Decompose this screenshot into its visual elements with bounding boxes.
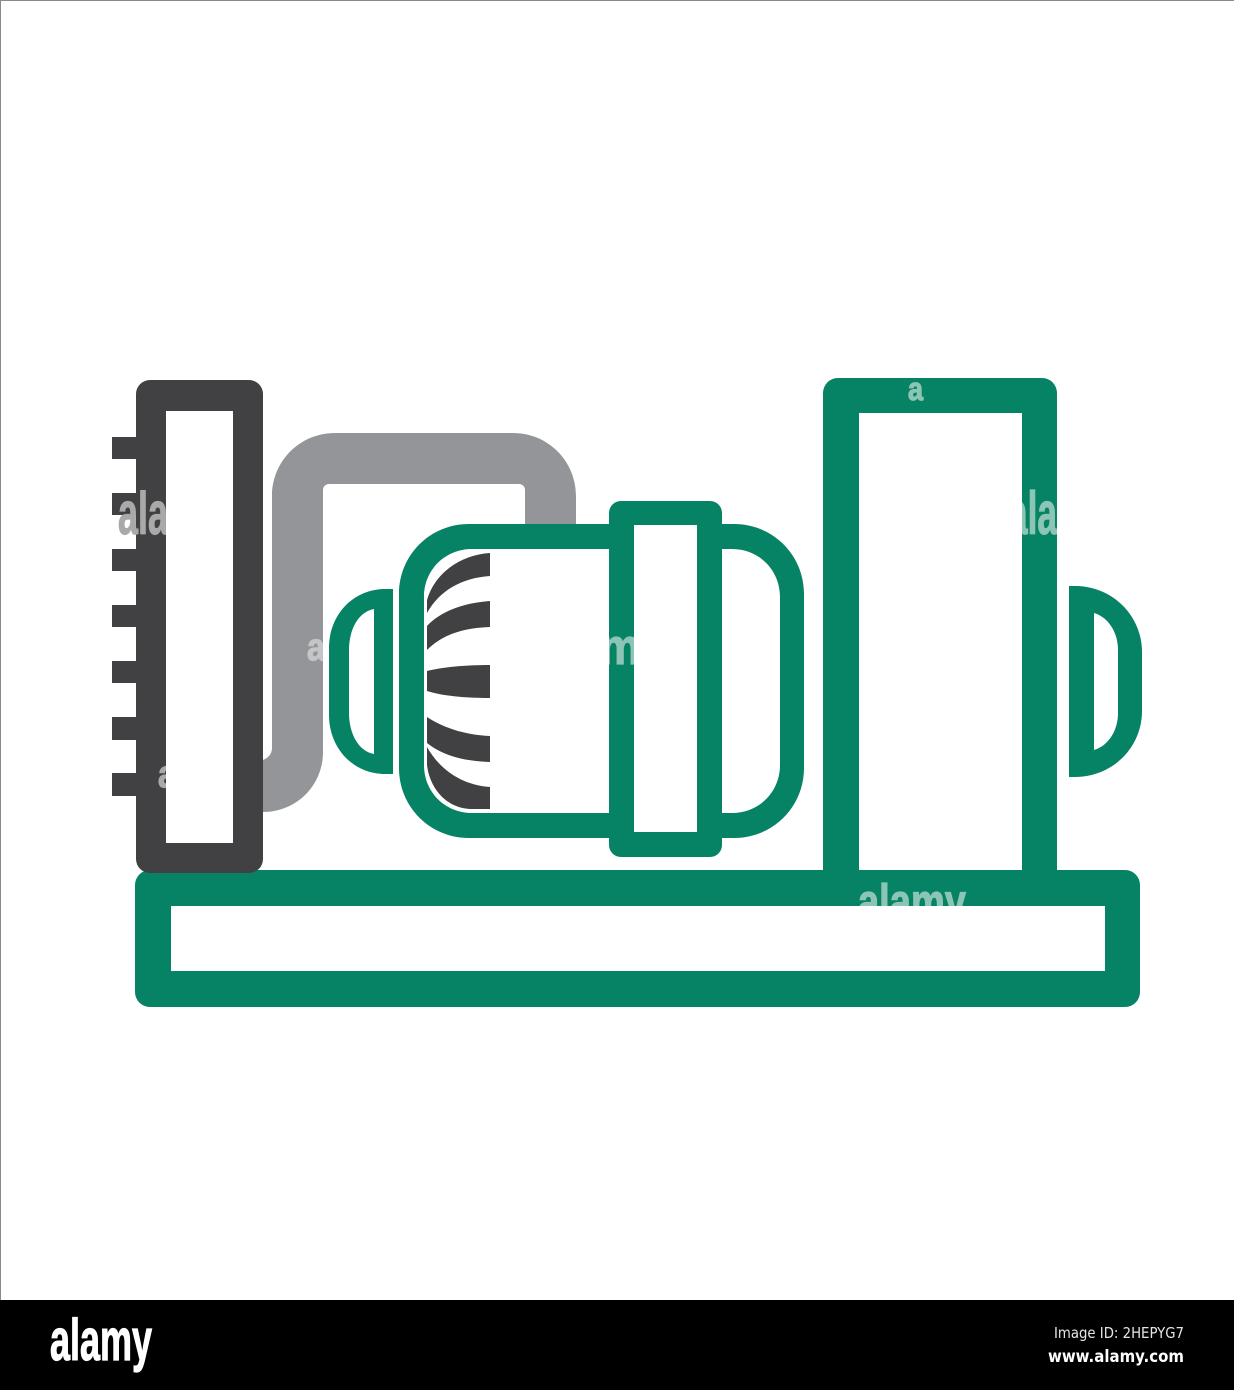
tall green tank bbox=[823, 378, 1057, 875]
footer logo: alamy bbox=[50, 1308, 152, 1373]
footer bar bbox=[0, 1300, 1234, 1390]
motor band bbox=[609, 501, 722, 857]
grey pipe bbox=[263, 433, 576, 812]
base platform bbox=[135, 870, 1140, 1007]
motor housing bbox=[399, 524, 804, 838]
motor cooling stripes bbox=[427, 553, 490, 809]
image id: Image ID: 2HEPYG7 bbox=[1054, 1324, 1184, 1342]
right cap bbox=[1069, 586, 1142, 777]
watermark fragments: a bbox=[158, 754, 177, 796]
radiator with fins bbox=[112, 380, 263, 873]
watermark fragments: ala bbox=[1008, 480, 1057, 547]
watermark fragments: m bbox=[600, 619, 640, 675]
watermark fragments bbox=[118, 371, 1057, 929]
left cap bbox=[329, 589, 393, 774]
watermark fragments: alamy bbox=[858, 876, 966, 929]
watermark fragments: a bbox=[307, 627, 326, 669]
watermark fragments: ala bbox=[118, 480, 168, 547]
website: www.alamy.com bbox=[1048, 1347, 1184, 1367]
watermark fragments: a bbox=[908, 371, 923, 407]
